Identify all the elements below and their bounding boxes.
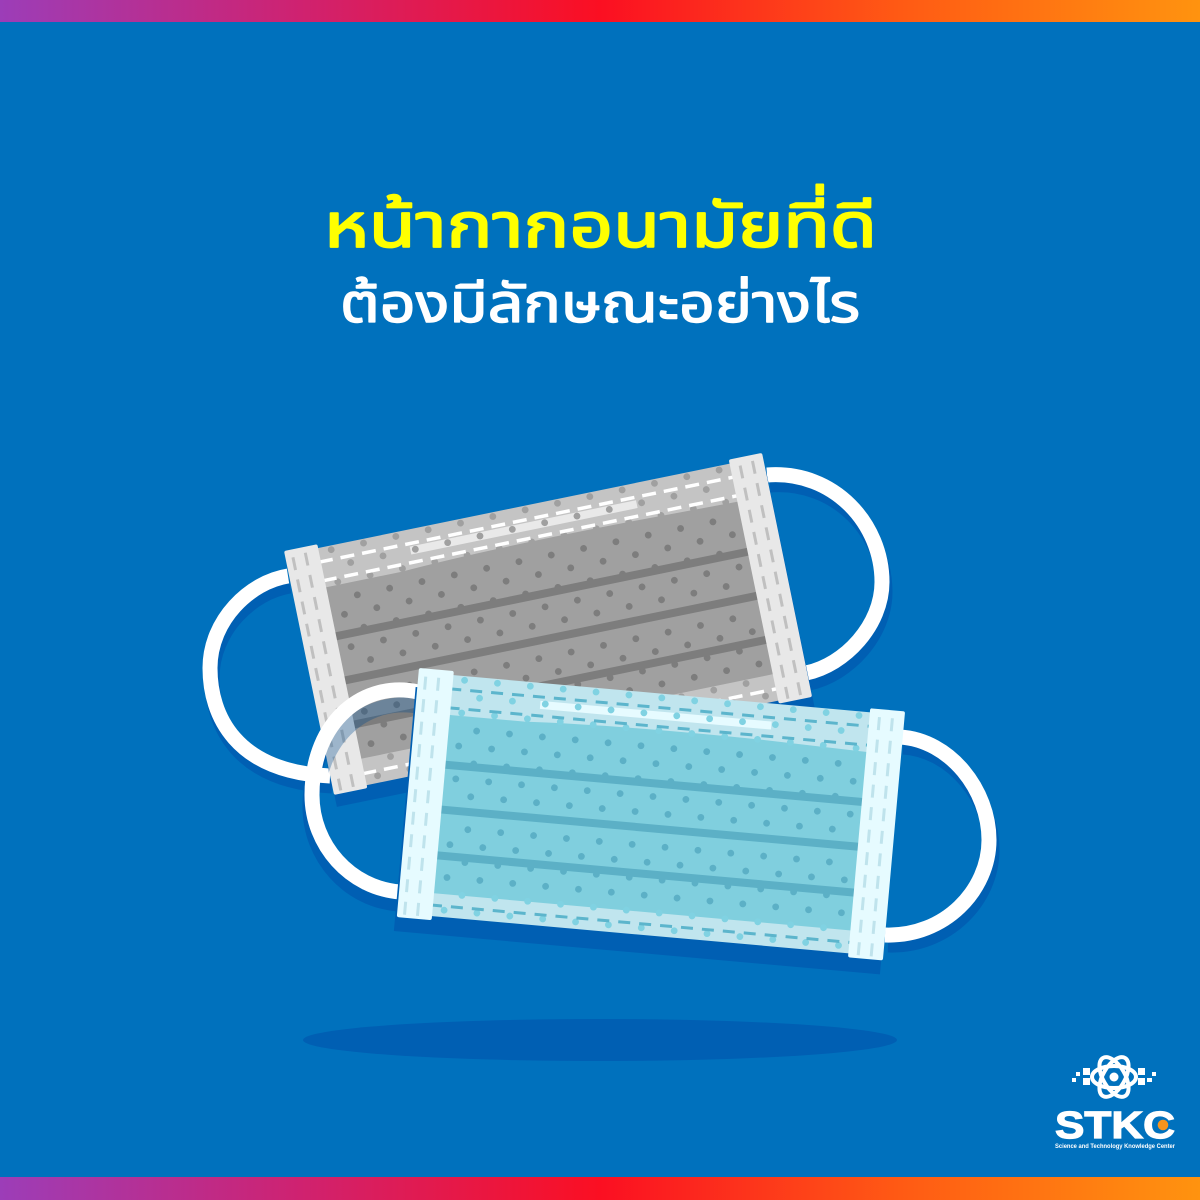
blue mask ear loops — [312, 690, 989, 935]
strips — [312, 463, 782, 786]
right band — [848, 708, 905, 960]
gray mask shadow — [288, 470, 815, 807]
logo tagline: Science and Technology Knowledge Center — [1055, 1144, 1176, 1150]
nose wire — [410, 500, 638, 554]
dots on strips — [331, 467, 781, 776]
bottom gradient bar — [0, 1177, 1200, 1200]
blue mask — [397, 668, 905, 960]
top gradient bar — [0, 0, 1200, 22]
heading line 1: หน้ากากอนามัยที่ดี — [324, 184, 877, 261]
stitching — [430, 689, 872, 943]
logo orange dot — [1154, 1117, 1170, 1133]
icon: pixel squares — [1072, 1068, 1156, 1085]
pleats — [330, 547, 770, 730]
dots on body — [341, 515, 774, 744]
band stitches — [404, 677, 892, 957]
logo: STKC — [1055, 1052, 1176, 1150]
dots on body — [447, 730, 870, 914]
blue mask loop shadow over gray mask — [326, 698, 414, 773]
ear loop shadows — [212, 485, 992, 945]
illustration: two face masks — [210, 453, 992, 974]
blue mask shadow — [394, 687, 902, 974]
nose wire — [540, 701, 772, 730]
gray mask ear loops — [210, 475, 882, 776]
dots on strips — [444, 680, 874, 947]
band stitches — [293, 461, 801, 790]
ground shadow — [303, 1019, 897, 1061]
stitching — [319, 477, 778, 774]
left band — [284, 544, 367, 795]
icon: atom — [1092, 1052, 1136, 1102]
left band — [397, 668, 454, 920]
title — [324, 184, 877, 334]
heading line 2: ต้องมีลักษณะอย่างไร — [340, 274, 860, 334]
right band — [729, 453, 812, 704]
logo wordmark: STKC — [1055, 1105, 1175, 1147]
strips — [425, 674, 875, 954]
pleats — [430, 760, 867, 897]
main body — [320, 499, 777, 760]
main body — [427, 711, 872, 931]
gray mask — [284, 453, 812, 795]
